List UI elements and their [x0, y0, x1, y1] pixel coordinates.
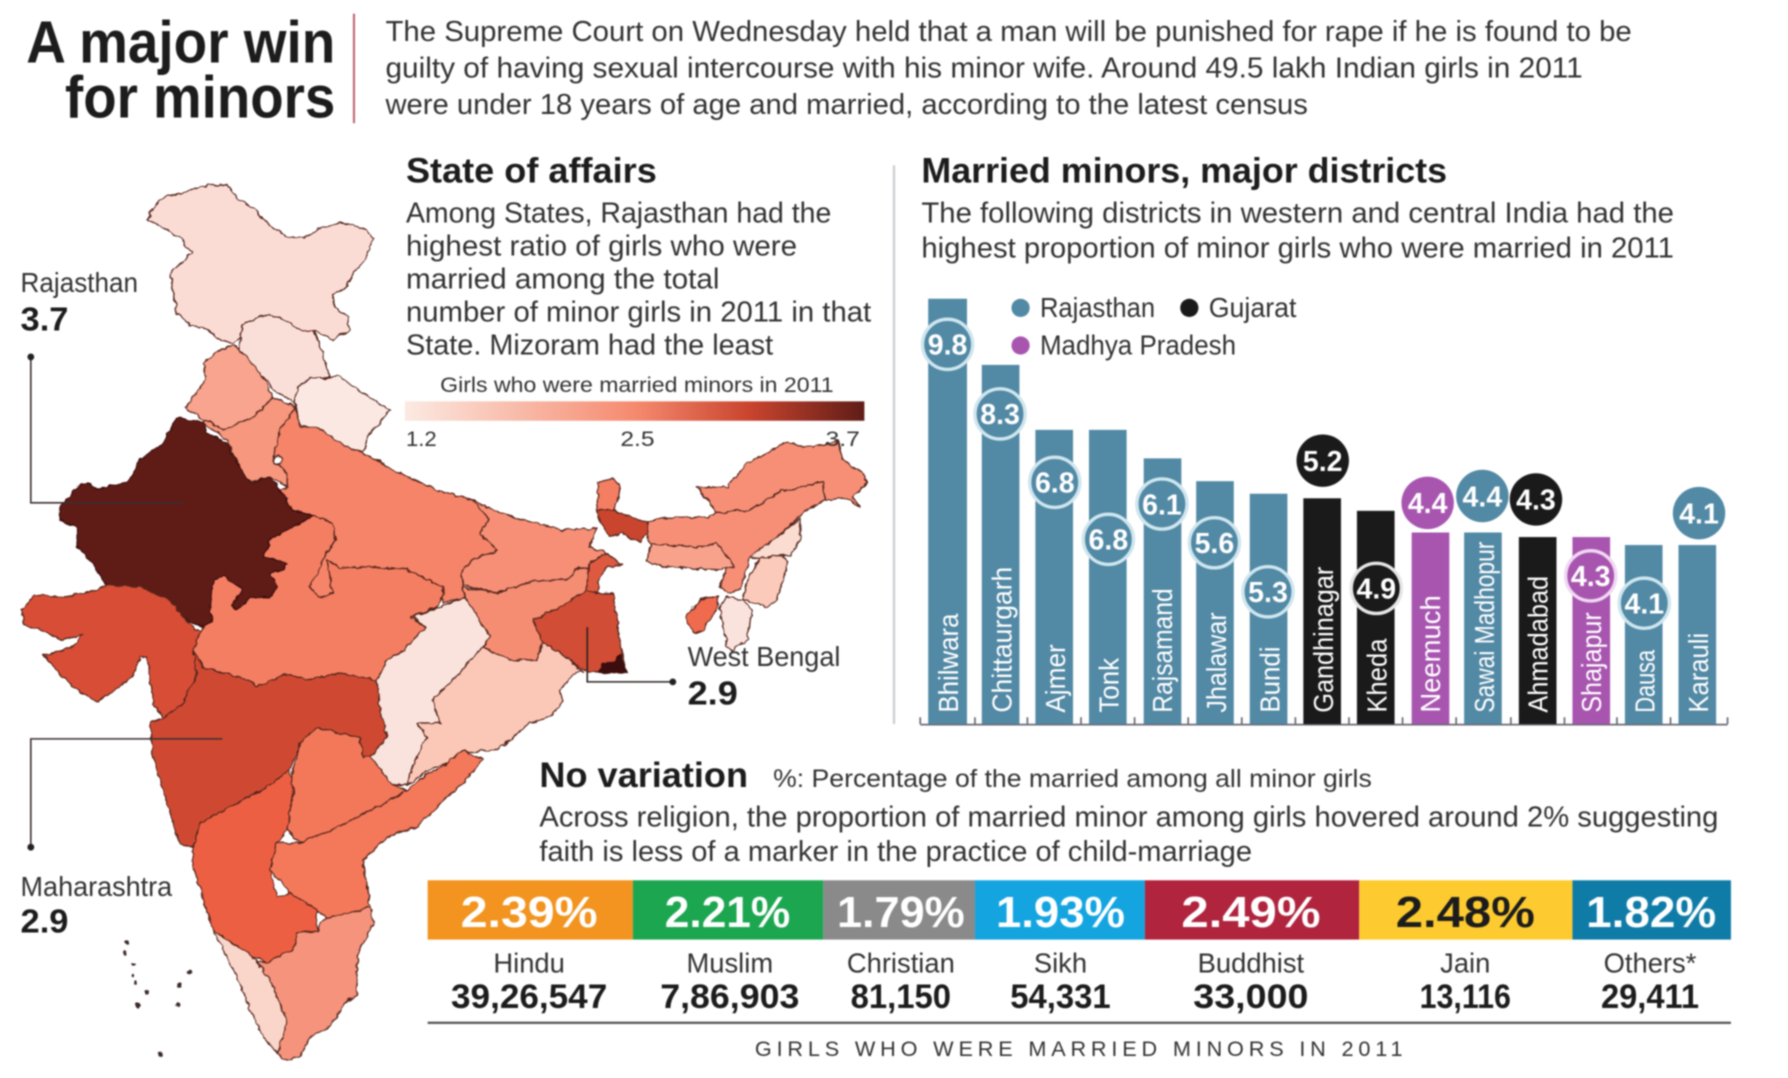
body text: Among States, Rajasthan had the	[406, 197, 831, 229]
bar: Bundi	[1243, 494, 1293, 724]
bar: Bundi: Bundi	[1254, 647, 1285, 713]
religion: Others: Others*	[1604, 948, 1697, 979]
colour legend: Girls who were married minors in 2011	[440, 372, 834, 397]
bar: Gandhinagar	[1297, 434, 1349, 724]
bar: Neemuch: Neemuch	[1415, 595, 1446, 713]
state: Maharashtra	[150, 650, 387, 847]
state: Meghalaya	[647, 543, 733, 570]
body text	[406, 197, 871, 362]
legend	[1011, 292, 1297, 361]
bar: Kheda: Kheda	[1362, 638, 1393, 713]
body text	[921, 197, 1674, 265]
state: Tripura	[687, 595, 718, 633]
religion: Jain: 13,116	[1420, 978, 1511, 1016]
heading: State of affairs	[406, 151, 657, 190]
bar chart	[920, 299, 1728, 725]
religion: Buddhist	[1145, 880, 1359, 1016]
panel: state of affairs	[405, 151, 871, 451]
bar: Tonk: Tonk	[1094, 658, 1125, 713]
state: Jammu and Kashmir	[147, 185, 373, 343]
column divider	[893, 165, 895, 724]
body text: faith is less of a marker in the practice of child-marriage	[539, 836, 1252, 868]
title: for minors	[65, 63, 335, 130]
religion: Christian: Christian	[847, 948, 955, 979]
bar: Ahmadabad: Ahmadabad	[1522, 576, 1553, 713]
bar: Rajsamand: Rajsamand	[1147, 588, 1178, 713]
bar: Gandhinagar: 5.2	[1303, 446, 1343, 478]
callout: Rajasthan: Rajasthan	[21, 267, 138, 298]
callout: West Bengal: 2.9	[688, 676, 738, 713]
religion: Muslim: Muslim	[686, 948, 773, 979]
religion: Hindu	[428, 880, 633, 1016]
state: Tamil Nadu	[257, 907, 373, 1060]
bar: Dausa: Dausa	[1630, 649, 1661, 713]
colour legend	[405, 372, 864, 451]
bar: Rajsamand: 6.1	[1142, 489, 1182, 521]
state: Himachal Pradesh	[240, 315, 330, 403]
callout: Maharashtra	[21, 739, 222, 941]
note: %: Percentage of the married among all minor girls	[773, 765, 1372, 793]
state: Nagaland	[750, 518, 800, 558]
state: Assam	[647, 482, 825, 593]
body text: The following districts in western and central India had the	[921, 197, 1674, 229]
bar: Ajmer: 6.8	[1035, 468, 1075, 500]
heading: No variation	[539, 756, 748, 795]
religion: Hindu: Hindu	[493, 948, 565, 979]
bar: Jhalawar: Jhalawar	[1201, 612, 1232, 713]
state: Andhra Pradesh	[270, 750, 483, 922]
bar: Ajmer	[1030, 430, 1080, 724]
body text: highest proportion of minor girls who were married in 2011	[921, 233, 1674, 265]
bar: Bundi: 5.3	[1248, 577, 1288, 609]
bar: Tonk	[1083, 430, 1133, 724]
islands	[123, 940, 192, 1057]
religion: Sikh	[975, 880, 1145, 1016]
heading: Married minors, major districts	[921, 151, 1447, 190]
bar: Shajapur: Shajapur	[1576, 612, 1607, 713]
title divider	[353, 14, 355, 123]
bar: Shajapur	[1566, 537, 1616, 724]
religion: Jain	[1359, 880, 1572, 1016]
religion: Sikh: 1.93%	[996, 889, 1125, 937]
body text: married among the total	[406, 263, 720, 295]
state: Sikkim	[597, 478, 620, 510]
bar: Ahmadabad: 4.3	[1516, 485, 1556, 517]
title: A major win	[26, 9, 335, 76]
bar: Ahmadabad	[1510, 473, 1562, 724]
state: Jharkhand	[463, 567, 588, 660]
intro text: guilty of having sexual intercourse with his minor wife. Around 49.5 lakh Indian girls in 2011	[385, 53, 1583, 85]
legend: Madhya Pradesh	[1040, 330, 1236, 361]
state: Kerala	[213, 930, 287, 1053]
state: Rajasthan	[60, 418, 313, 628]
intro text	[384, 16, 1632, 121]
bar: Shajapur: 4.3	[1571, 561, 1611, 593]
axis	[920, 717, 1728, 725]
callout: West Bengal: West Bengal	[688, 641, 840, 672]
bar: Bhilwara: Bhilwara	[933, 613, 964, 713]
bar: Ajmer: Ajmer	[1040, 644, 1071, 713]
religion: Buddhist: 2.49%	[1181, 889, 1320, 937]
panel: no variation	[428, 756, 1731, 1061]
state: Telangana	[287, 728, 407, 843]
body text: number of minor girls in 2011 in that	[406, 297, 871, 329]
religion: Buddhist: 33,000	[1193, 978, 1308, 1016]
panel: married minors, major districts	[920, 151, 1728, 725]
bar: Bhilwara: 9.8	[928, 330, 967, 362]
bar: Rajsamand	[1137, 458, 1187, 724]
bar: Karauli: Karauli	[1683, 633, 1714, 713]
religion: Jain: Jain	[1440, 948, 1490, 979]
colour legend: 1.2	[406, 426, 437, 451]
colour legend: 2.5	[620, 426, 655, 451]
bar: Sawai Madhopur: Sawai Madhopur	[1469, 542, 1500, 713]
religion: Sikh: 54,331	[1010, 978, 1111, 1016]
religion: Sikh: Sikh	[1034, 948, 1087, 979]
callout: Rajasthan: 3.7	[21, 302, 68, 339]
state: Uttar Pradesh	[273, 407, 497, 603]
bar: Neemuch: 4.4	[1408, 488, 1448, 520]
bar: Chittaurgarh: 8.3	[980, 399, 1020, 431]
religion: Hindu: 2.39%	[461, 889, 598, 937]
religion: Hindu: 39,26,547	[451, 978, 607, 1016]
religion: Christian: 1.79%	[837, 889, 965, 937]
Sundarbans	[597, 652, 627, 673]
state: Karnataka	[193, 770, 317, 962]
bar: Sawai Madhopur: 4.4	[1463, 481, 1502, 513]
bar: Jhalawar	[1189, 481, 1239, 724]
bar: Dausa: 4.1	[1624, 588, 1664, 620]
state: Uttarakhand	[295, 375, 390, 453]
religion: Others	[1572, 880, 1731, 1016]
bar: Neemuch	[1401, 477, 1454, 724]
religion: Jain: 2.48%	[1396, 889, 1535, 937]
bar: Kheda	[1351, 511, 1401, 724]
religion: Christian: 81,150	[851, 978, 951, 1016]
bar: Karauli: 4.1	[1679, 498, 1719, 530]
bar: Bhilwara	[923, 299, 973, 724]
religion: Christian	[823, 880, 975, 1016]
state: Mizoram	[720, 597, 752, 650]
callout: Maharashtra: Maharashtra	[21, 871, 173, 902]
intro text: were under 18 years of age and married, according to the latest census	[384, 89, 1308, 121]
bar: Gandhinagar: Gandhinagar	[1308, 567, 1339, 713]
state: Odisha	[407, 637, 583, 785]
religion: Muslim: 7,86,903	[660, 978, 799, 1016]
intro text: The Supreme Court on Wednesday held that a man will be punished for rape if he is found to be	[385, 16, 1632, 48]
legend: Gujarat	[1209, 292, 1297, 323]
state: Madhya Pradesh	[193, 516, 443, 687]
bar: Chittaurgarh: Chittaurgarh	[986, 567, 1017, 713]
state: Chhattisgarh	[370, 597, 490, 785]
caption: GIRLS WHO WERE MARRIED MINORS IN 2011	[755, 1036, 1403, 1061]
religion: Others: 1.82%	[1586, 889, 1716, 937]
title	[26, 9, 335, 130]
body text: highest ratio of girls who were	[406, 230, 797, 262]
state: Bihar	[460, 500, 607, 593]
header	[26, 9, 1632, 130]
religion: Buddhist: Buddhist	[1198, 948, 1305, 979]
body text: Across religion, the proportion of married minor among girls hovered around 2% suggesting	[539, 802, 1718, 834]
state: Arunachal Pradesh	[697, 440, 867, 513]
bottom rule	[428, 1022, 1731, 1024]
bar: Sawai Madhopur	[1456, 470, 1509, 724]
bar: Chittaurgarh	[975, 365, 1025, 724]
bar: Karauli	[1673, 487, 1725, 724]
bar: Tonk: 6.8	[1089, 525, 1128, 557]
legend: Rajasthan	[1040, 292, 1155, 323]
religion: Muslim	[633, 880, 823, 1016]
state: West Bengal middle	[587, 553, 622, 593]
callout: Rajasthan	[21, 267, 182, 503]
callout: Maharashtra: 2.9	[21, 904, 68, 941]
state: Manipur	[743, 555, 788, 607]
body text	[539, 802, 1718, 868]
bar: Dausa	[1619, 545, 1669, 724]
state: Punjab	[185, 345, 273, 430]
state: West Bengal south	[533, 590, 627, 673]
state: Gujarat	[21, 585, 200, 718]
religion: Muslim: 2.21%	[665, 889, 790, 937]
religion: Others: 29,411	[1601, 978, 1699, 1016]
icon: Delhi	[274, 456, 282, 464]
body text: State. Mizoram had the least	[406, 330, 773, 362]
colour legend: 3.7	[826, 426, 860, 451]
callout: West Bengal	[587, 627, 840, 713]
state: Haryana	[203, 397, 295, 487]
panel: india map	[21, 185, 867, 1060]
bar: Jhalawar: 5.6	[1195, 528, 1234, 560]
bar: Kheda: 4.9	[1357, 574, 1396, 606]
state: West Bengal north	[597, 510, 647, 542]
